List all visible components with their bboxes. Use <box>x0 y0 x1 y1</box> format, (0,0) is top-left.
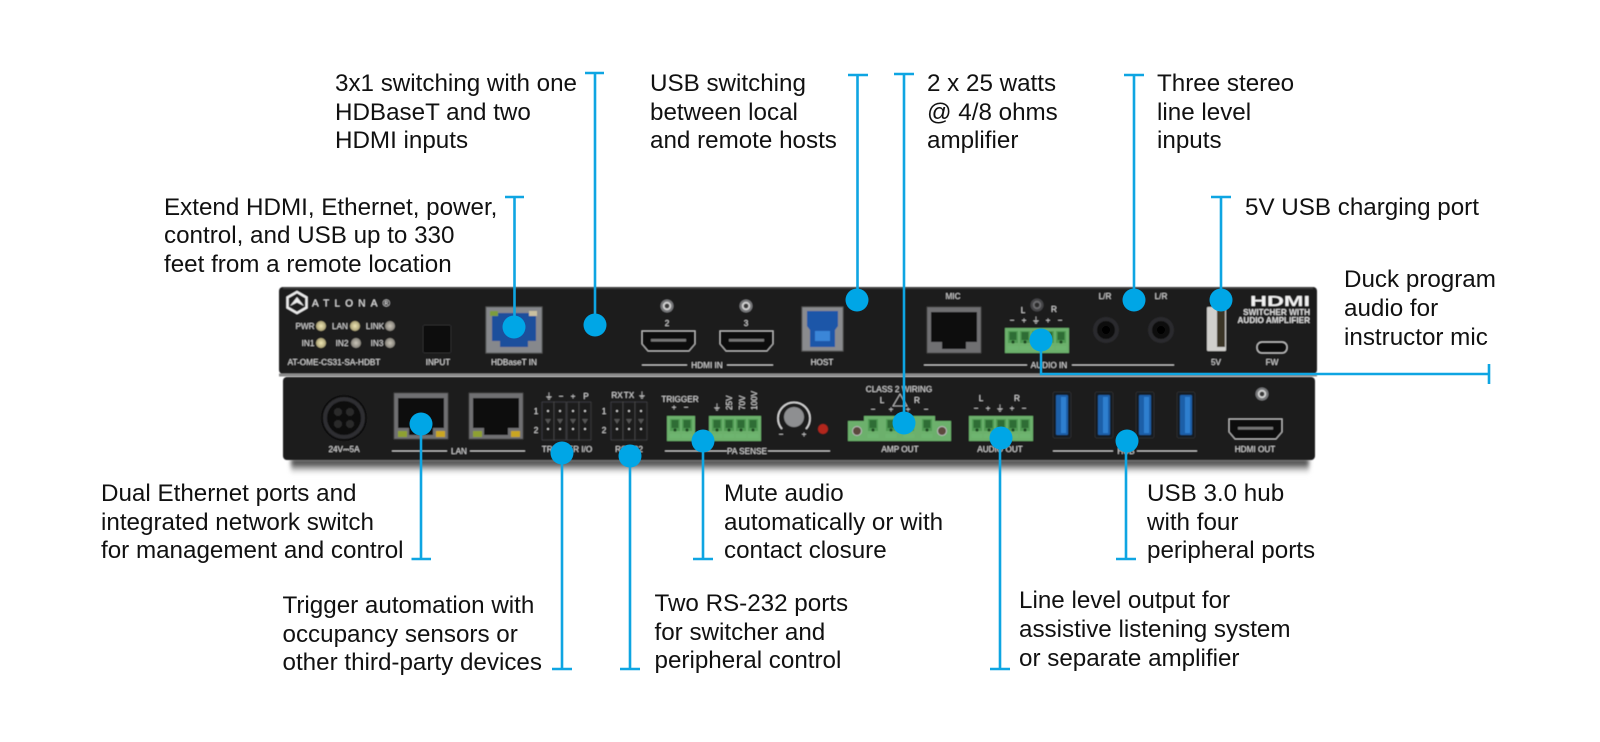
mic jack <box>927 292 981 353</box>
trigger I/O terminal: − <box>559 392 564 401</box>
callout: Ethernet: for management and control <box>101 537 404 564</box>
trigger and PA sense terminals: TRIGGER <box>661 395 699 404</box>
HDBaseT jack <box>486 307 542 367</box>
HDMI inputs: HDMI IN <box>691 361 723 370</box>
HDMI switcher badge <box>1238 294 1310 325</box>
trigger I/O terminal: ⏚ <box>545 392 553 401</box>
HDBaseT jack: HDBaseT IN <box>491 358 537 367</box>
HDMI switcher badge: HDMI <box>1250 294 1310 310</box>
USB host port: HOST <box>811 358 833 367</box>
amp out terminal: L <box>880 396 885 405</box>
LAN ports <box>392 393 525 456</box>
RS-232 terminal: 2 <box>602 426 607 435</box>
audio in terminal: − <box>1058 316 1063 325</box>
callout: HDBaseT extension: control, and USB up to 330 <box>164 222 454 249</box>
trigger and PA sense terminals: − <box>684 403 689 412</box>
callout: HDBaseT extension: Extend HDMI, Ethernet, power, <box>164 194 497 221</box>
amp out terminal: R <box>914 396 920 405</box>
callout: trigger: occupancy sensors or <box>282 621 518 648</box>
stereo line inputs: L/R <box>1099 292 1111 301</box>
audio out terminal: L <box>979 394 984 403</box>
audio in terminal: − <box>1010 316 1015 325</box>
callout: line level output: Line level output for <box>1019 587 1230 614</box>
audio in terminal: AUDIO IN <box>1031 361 1067 370</box>
callout: USB switching: USB switching <box>650 70 806 97</box>
volume knob and LED: + <box>802 430 807 439</box>
callout: USB hub: with four <box>1146 509 1238 536</box>
callout: RS-232: for switcher and <box>654 619 825 646</box>
callout: USB charging: 5V USB charging port <box>1245 194 1479 221</box>
audio out terminal: − <box>974 404 979 413</box>
callout: HDBaseT extension <box>164 194 526 338</box>
callout: Ethernet: Dual Ethernet ports and <box>101 480 356 507</box>
HDMI switcher badge: AUDIO AMPLIFIER <box>1238 316 1310 325</box>
callout: amplifier <box>892 70 1058 434</box>
amp out terminal: − <box>871 405 876 414</box>
audio out terminal: R <box>1014 394 1020 403</box>
input button: INPUT <box>426 358 450 367</box>
status LEDs: IN2 <box>336 339 349 348</box>
USB hub ports: HUB <box>1117 447 1135 456</box>
amp out terminal: − <box>924 405 929 414</box>
status LEDs: LINK <box>366 322 385 331</box>
USB host port <box>802 307 843 367</box>
callout: 3x1 switching <box>335 70 606 336</box>
RS-232 terminal: TX <box>624 391 635 400</box>
RS-232 terminal: RS-232 <box>615 445 643 454</box>
trigger and PA sense terminals: + <box>672 403 677 412</box>
callout: amplifier: 2 x 25 watts <box>927 70 1056 97</box>
trigger I/O terminal <box>534 392 592 454</box>
status LEDs: IN3 <box>371 339 384 348</box>
trigger and PA sense terminals: 25V <box>725 395 734 410</box>
audio out terminal <box>969 394 1033 454</box>
audio in terminal: ⏚ <box>1032 316 1040 325</box>
callout: USB switching <box>650 70 868 312</box>
audio out terminal: ⏚ <box>996 404 1004 413</box>
callout: ducking: instructor mic <box>1344 324 1488 351</box>
HDMI inputs <box>642 300 773 370</box>
audio out terminal: − <box>1022 404 1027 413</box>
panel: top unit <box>279 287 1317 374</box>
amp out terminal: + <box>906 405 911 414</box>
trigger I/O terminal: P <box>583 392 589 401</box>
callout: RS-232: Two RS-232 ports <box>654 590 848 617</box>
callout: RS-232: peripheral control <box>654 647 841 674</box>
firmware USB-C port <box>1257 342 1287 367</box>
RS-232 terminal: RX <box>611 391 623 400</box>
audio in terminal: L <box>1021 306 1026 315</box>
callout: RS-232 <box>618 444 848 674</box>
callout: HDBaseT extension: feet from a remote location <box>164 251 452 278</box>
callout: Ethernet <box>101 412 432 564</box>
callout: mute <box>692 430 943 564</box>
audio out terminal: AUDIO OUT <box>977 445 1023 454</box>
power connector: 24V⎓5A <box>328 445 360 454</box>
callout: 3x1 switching: HDBaseT and two <box>335 99 531 126</box>
audio in terminal: + <box>1046 316 1051 325</box>
amp out terminal: CLASS 2 WIRING <box>866 385 932 394</box>
HDMI inputs: 3 <box>744 319 749 328</box>
trigger and PA sense terminals: 100V <box>750 390 759 410</box>
callout: USB hub: peripheral ports <box>1147 537 1315 564</box>
trigger and PA sense terminals: ⏚ <box>713 403 721 412</box>
HDMI output <box>1229 388 1282 454</box>
callout: Ethernet: integrated network switch <box>101 509 374 536</box>
callout: ducking: audio for <box>1344 295 1438 322</box>
trigger and PA sense terminals <box>661 390 830 456</box>
trigger I/O terminal: 1 <box>534 407 539 416</box>
trigger I/O terminal: + <box>571 392 576 401</box>
HDMI output: HDMI OUT <box>1235 445 1275 454</box>
RS-232 terminal <box>602 391 647 454</box>
HDMI inputs: 2 <box>665 319 670 328</box>
Atlona logo <box>288 292 391 313</box>
RS-232 terminal: 1 <box>602 407 607 416</box>
callout: USB switching: and remote hosts <box>650 127 837 154</box>
USB hub ports <box>1053 392 1197 456</box>
callout: amplifier: amplifier <box>927 127 1018 154</box>
LAN ports: LAN <box>451 447 467 456</box>
audio in terminal: R <box>1051 305 1057 314</box>
callout: ducking <box>1030 266 1496 384</box>
status LEDs: IN1 <box>302 339 315 348</box>
status LEDs <box>295 321 395 348</box>
USB charging port: 5V <box>1211 358 1222 367</box>
callout: stereo inputs: Three stereo <box>1157 70 1294 97</box>
callout: line level output <box>990 426 1291 672</box>
callout: amplifier: @ 4/8 ohms <box>927 99 1058 126</box>
callout: stereo inputs: line level <box>1157 99 1251 126</box>
model number: AT-OME-CS31-SA-HDBT <box>288 358 380 367</box>
amp out terminal: AMP OUT <box>881 445 919 454</box>
callout: line level output: or separate amplifier <box>1019 645 1239 672</box>
callout: mute: Mute audio <box>724 480 844 507</box>
trigger and PA sense terminals: PA SENSE <box>727 447 767 456</box>
power connector <box>322 396 366 454</box>
audio out terminal: + <box>1010 404 1015 413</box>
mic jack: MIC <box>945 292 961 301</box>
volume knob and LED <box>778 402 828 439</box>
HDMI switcher badge: SWITCHER WITH <box>1243 308 1310 317</box>
audio in terminal: + <box>1022 316 1027 325</box>
trigger and PA sense terminals: 70V <box>738 395 747 410</box>
stereo line inputs: L/R <box>1155 292 1167 301</box>
callout: line level output: assistive listening system <box>1019 616 1291 643</box>
callout: 3x1 switching: HDMI inputs <box>335 127 468 154</box>
amp out terminal <box>848 385 951 454</box>
callout: USB hub: USB 3.0 hub <box>1147 480 1284 507</box>
RS-232 terminal: ⏚ <box>638 391 646 400</box>
status LEDs: PWR <box>295 322 315 331</box>
volume knob and LED: − <box>779 430 784 439</box>
trigger I/O terminal: TRIGGER I/O <box>542 445 592 454</box>
callout: USB charging <box>1210 194 1479 312</box>
input button <box>423 325 451 367</box>
callout: trigger: Trigger automation with <box>282 592 534 619</box>
callout: trigger: other third-party devices <box>282 649 542 676</box>
callout: trigger <box>282 442 574 676</box>
panel: bottom unit <box>279 374 1317 460</box>
callout: stereo inputs <box>1122 70 1294 312</box>
callout: USB switching: between local <box>650 99 798 126</box>
callout: ducking: Duck program <box>1344 266 1496 293</box>
callout: stereo inputs: inputs <box>1157 127 1222 154</box>
status LEDs: LAN <box>332 322 348 331</box>
firmware USB-C port: FW <box>1266 358 1279 367</box>
callout: mute: contact closure <box>724 537 887 564</box>
Atlona logo: ATLONA® <box>312 298 391 310</box>
USB charging port <box>1207 307 1226 367</box>
callout: USB hub <box>1116 430 1315 564</box>
callout: 3x1 switching: 3x1 switching with one <box>335 70 577 97</box>
trigger I/O terminal: 2 <box>534 426 539 435</box>
callout: mute: automatically or with <box>724 509 943 536</box>
audio in terminal <box>924 298 1174 370</box>
audio out terminal: + <box>986 404 991 413</box>
shadow under device <box>291 459 1309 476</box>
amp out terminal: + <box>889 405 894 414</box>
device: front and rear panels <box>279 287 1317 460</box>
stereo line inputs <box>1093 292 1174 343</box>
